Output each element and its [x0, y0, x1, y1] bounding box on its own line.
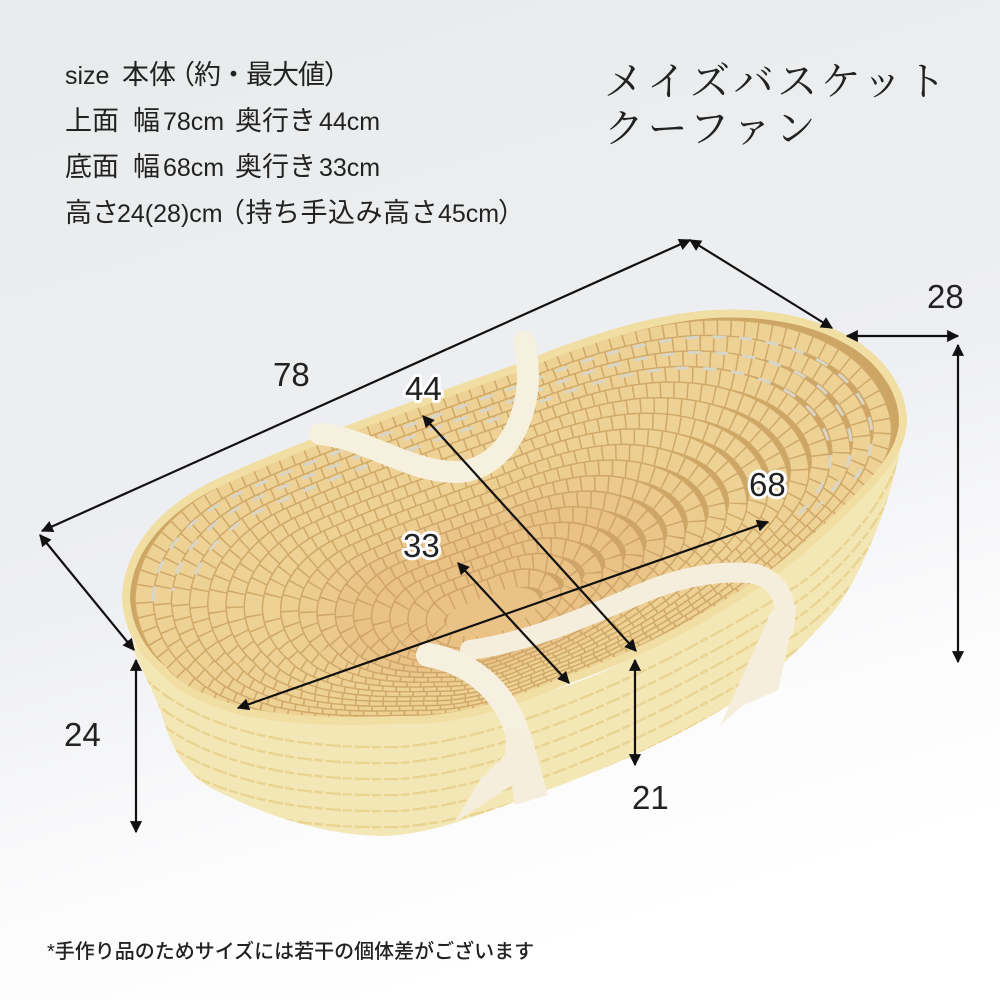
- front handle near loop: [428, 655, 518, 735]
- spec line 4: ）: [498, 198, 525, 228]
- spec line 3: 幅: [133, 152, 160, 182]
- arrow: inner depth 44: [423, 416, 636, 651]
- label 78: 78: [273, 356, 310, 393]
- arrow: left edge: [40, 535, 134, 650]
- weave holes on back wall: [152, 335, 873, 602]
- arrow: height 24: [135, 660, 137, 832]
- basket interior: [126, 314, 903, 721]
- arrow: 28 horizontal: [847, 335, 958, 337]
- label 33: 33: [403, 527, 440, 564]
- front handle far loop: [470, 573, 785, 650]
- spec line 2: 44cm: [319, 108, 380, 136]
- spec text: [65, 60, 525, 228]
- title: クーファン: [604, 97, 819, 154]
- spec line 1: size: [65, 62, 109, 90]
- arrow: height 21: [634, 660, 636, 765]
- arrow: depth 44 top: [690, 240, 832, 328]
- spec line 2: 幅: [133, 106, 160, 136]
- spec line 2: 78cm: [163, 108, 224, 136]
- label 44: 44: [405, 370, 442, 407]
- arrow: bottom depth 33: [458, 563, 569, 683]
- spec line 3: 奥行き: [235, 152, 316, 182]
- spec line 1: 本体: [122, 60, 176, 90]
- title: [604, 50, 950, 154]
- interior coils: [144, 329, 882, 716]
- front handle strap left: [455, 728, 548, 822]
- label 28: 28: [927, 278, 964, 315]
- basket rim: [126, 314, 903, 721]
- back handle: [320, 342, 528, 472]
- spec line 3: 68cm: [163, 154, 224, 182]
- title: メイズバスケット: [604, 50, 950, 107]
- spec line 3: 33cm: [319, 154, 380, 182]
- spec line 4: 高さ: [65, 198, 119, 228]
- spec line 1: （約・最大値）: [168, 60, 350, 90]
- label 21: 21: [632, 779, 669, 816]
- front handle strap right: [720, 605, 797, 726]
- arrow: bottom width 68: [238, 522, 768, 708]
- spec line 4: 24(28)cm: [117, 200, 223, 228]
- basket outer body: [130, 422, 903, 836]
- spec line 4: （持ち手込み高さ: [218, 198, 438, 228]
- footnote: *手作り品のためサイズには若干の個体差がございます: [47, 939, 534, 963]
- label 24: 24: [64, 716, 101, 753]
- basket body weave: [140, 439, 905, 827]
- basket: [126, 314, 905, 836]
- spec line 3: 底面: [65, 152, 119, 182]
- spec line 2: 奥行き: [235, 106, 316, 136]
- spec line 2: 上面: [65, 106, 119, 136]
- label 68: 68: [749, 466, 786, 503]
- arrow: 28 vertical: [957, 345, 959, 662]
- spec line 4: 45cm: [438, 200, 499, 228]
- arrow: width 78: [42, 240, 690, 531]
